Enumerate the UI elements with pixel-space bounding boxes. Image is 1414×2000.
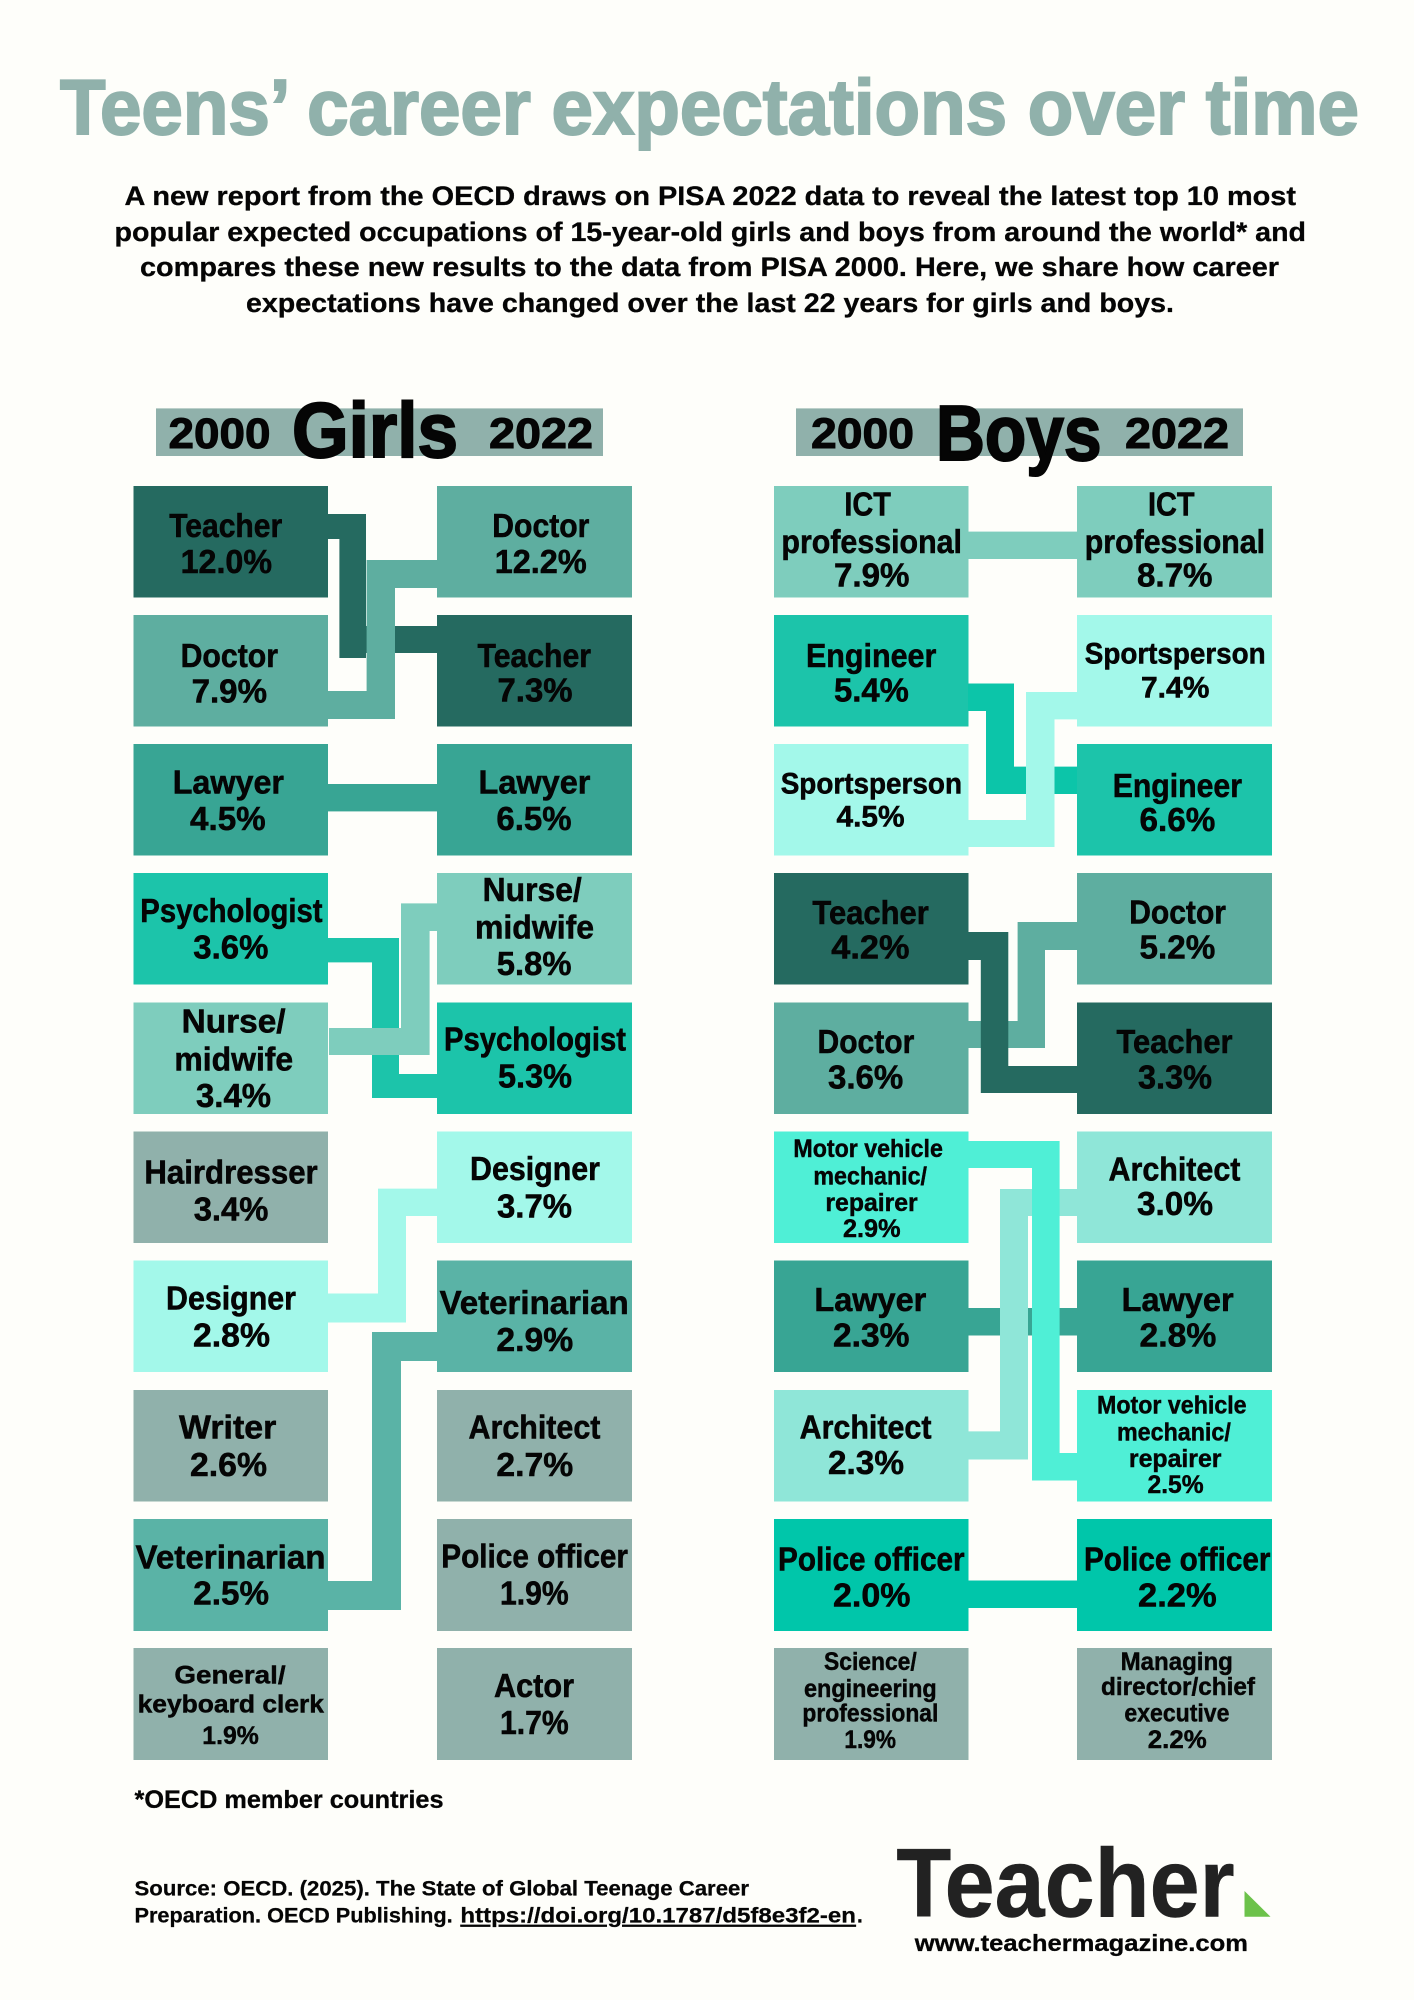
box: teacher 2000 [134, 486, 328, 598]
box: actor 2022: Actor [494, 1667, 574, 1704]
box: sportsperson 2022 [1077, 615, 1272, 726]
box: psychologist 2022: Psychologist [444, 1021, 626, 1058]
box: doctor 2022: Doctor [1129, 893, 1226, 930]
source text block: Preparation. OECD Publishing. [134, 1905, 453, 1928]
box: psychologist 2000 [134, 873, 328, 984]
box: architect 2000: 2.3% [828, 1444, 904, 1481]
box: ict professional 2022: ICT [1148, 486, 1195, 522]
box: lawyer 2000: Lawyer [173, 764, 284, 800]
box: nurse 2022: midwife [475, 908, 594, 945]
box: nurse 2000: Nurse/ [182, 1003, 286, 1040]
box: designer 2000: 2.8% [193, 1317, 270, 1354]
box: police officer 2022: Police officer [441, 1538, 628, 1575]
box: police officer 2000: Police officer [778, 1541, 965, 1578]
box: hairdresser 2000 [134, 1132, 328, 1243]
heading: boys 2000 / 2022: 2022 [1125, 410, 1229, 458]
source text block: . [857, 1905, 863, 1928]
connector: teacher [968, 932, 1077, 1093]
connector: designer [328, 1189, 437, 1322]
box: engineer 2022: 6.6% [1140, 801, 1215, 838]
box: motor vehicle mechanic 2022: Motor vehicle [1097, 1392, 1247, 1420]
box: police officer 2022: Police officer [1084, 1541, 1271, 1578]
box: designer 2022: 3.7% [497, 1188, 572, 1225]
connector: engineer [968, 684, 1077, 794]
box: actor 2022 [437, 1648, 632, 1760]
connector: psychologist [328, 938, 437, 1098]
box: doctor 2000: 3.6% [828, 1058, 903, 1095]
box: nurse 2000: midwife [174, 1040, 293, 1078]
box: science professional 2000: 1.9% [844, 1726, 896, 1754]
box: motor vehicle mechanic 2000: 2.9% [843, 1215, 900, 1243]
connector: motor vehicle mechanic [968, 1141, 1077, 1480]
box: general clerk 2000: 1.9% [202, 1722, 259, 1750]
source text block: https://doi.org/10.1787/d5f8e3f2-en [460, 1905, 856, 1928]
box: nurse 2000: 3.4% [196, 1077, 271, 1114]
box: teacher 2022: 3.3% [1138, 1058, 1212, 1095]
box: ict professional 2000 [774, 486, 968, 598]
box: doctor 2000: Doctor [818, 1023, 914, 1060]
box: engineer 2022: Engineer [1113, 767, 1242, 804]
box: police officer 2022: 1.9% [500, 1575, 569, 1612]
intro text block [114, 181, 1306, 318]
box: doctor 2000 [774, 1002, 968, 1114]
box: psychologist 2022: 5.3% [498, 1058, 572, 1094]
box: lawyer 2022 [437, 744, 632, 856]
box: lawyer 2022: 2.8% [1140, 1317, 1216, 1354]
box: architect 2022: Architect [468, 1408, 600, 1446]
box: veterinarian 2022: 2.9% [496, 1321, 573, 1358]
footnote: *OECD member countries [134, 1786, 444, 1814]
box: psychologist 2000: Psychologist [140, 892, 322, 929]
box: architect 2022 [1077, 1132, 1272, 1243]
box: police officer 2022 [1077, 1519, 1272, 1631]
box: motor vehicle mechanic 2022: mechanic/ [1117, 1418, 1231, 1446]
box: police officer 2000 [774, 1519, 968, 1631]
box: hairdresser 2000: 3.4% [194, 1191, 268, 1228]
heading: girls 2000 / 2022 [156, 386, 603, 474]
box: engineer 2000 [774, 615, 968, 726]
panel: boys [774, 389, 1272, 1760]
connector: doctor [968, 922, 1077, 1048]
connector: lawyer [328, 784, 437, 811]
box: ict professional 2000: 7.9% [834, 556, 910, 593]
box: doctor 2022 [1077, 873, 1272, 984]
box: veterinarian 2000 [134, 1519, 328, 1631]
box: nurse 2022: 5.8% [497, 945, 572, 982]
box: lawyer 2022: Lawyer [1122, 1281, 1234, 1318]
box: veterinarian 2000: Veterinarian [136, 1538, 326, 1576]
intro text block: A new report from the OECD draws on PISA 2022 data to reveal the latest top 10 most [124, 181, 1296, 211]
box: motor vehicle mechanic 2000: repairer [825, 1189, 918, 1217]
box: police officer 2022: 2.2% [1138, 1576, 1217, 1613]
box: doctor 2000 [134, 615, 328, 726]
logo: Teacher magazine: Teacher [896, 1829, 1235, 1938]
box: motor vehicle mechanic 2000: mechanic/ [813, 1162, 927, 1190]
box: architect 2022: Architect [1108, 1150, 1240, 1188]
box: lawyer 2022: 6.5% [496, 800, 572, 837]
box: engineer 2000: Engineer [806, 637, 936, 674]
heading: girls 2000 / 2022: 2022 [489, 410, 593, 458]
box: actor 2022: 1.7% [500, 1704, 569, 1741]
box: architect 2000: Architect [800, 1408, 932, 1446]
box: motor vehicle mechanic 2022: repairer [1129, 1445, 1222, 1473]
box: doctor 2022: Doctor [492, 507, 590, 544]
box: lawyer 2000 [774, 1260, 968, 1372]
connector: lawyer [968, 1308, 1077, 1336]
box: ict professional 2000: ICT [844, 486, 891, 522]
box: ict professional 2000: professional [781, 523, 962, 560]
box: teacher 2000 [774, 873, 968, 984]
box: motor vehicle mechanic 2022 [1077, 1390, 1272, 1502]
box: veterinarian 2022 [437, 1260, 632, 1372]
panel: girls [134, 386, 632, 1760]
box: nurse 2022: Nurse/ [483, 871, 582, 908]
box: hairdresser 2000: Hairdresser [144, 1154, 318, 1191]
connector: sportsperson [968, 692, 1077, 847]
connector: doctor [328, 560, 437, 719]
box: sportsperson 2000 [774, 744, 968, 856]
box: designer 2022: Designer [470, 1150, 600, 1187]
box: engineer 2022 [1077, 744, 1272, 856]
box: writer 2000 [134, 1390, 328, 1502]
box: designer 2000: Designer [166, 1280, 296, 1316]
box: sportsperson 2000: Sportsperson [781, 768, 962, 800]
box: nurse 2000 [134, 1002, 328, 1114]
box: sportsperson 2022: 7.4% [1141, 672, 1209, 705]
box: motor vehicle mechanic 2000 [774, 1132, 968, 1243]
box: teacher 2022 [437, 615, 632, 726]
title: Teens’ career expectations over time [60, 63, 1359, 151]
connector: nurse [329, 903, 437, 1055]
box: architect 2000 [774, 1390, 968, 1502]
box: motor vehicle mechanic 2000: Motor vehicle [793, 1135, 943, 1163]
box: doctor 2022: 5.2% [1140, 929, 1215, 966]
box: managing director 2022 [1077, 1648, 1272, 1760]
box: teacher 2000: Teacher [169, 507, 282, 544]
logo: Teacher magazine: www.teachermagazine.com [914, 1930, 1248, 1956]
source text block: Source: OECD. (2025). The State of Global Teenage Career [134, 1878, 749, 1901]
heading: boys 2000 / 2022: Boys [936, 389, 1102, 477]
box: ict professional 2022: professional [1085, 523, 1265, 560]
box: lawyer 2000: Lawyer [814, 1281, 926, 1318]
box: writer 2000: 2.6% [190, 1446, 267, 1483]
box: architect 2022 [437, 1390, 632, 1502]
box: lawyer 2022 [1077, 1260, 1272, 1372]
box: doctor 2022 [437, 486, 632, 598]
connector: architect [968, 1189, 1077, 1460]
box: ict professional 2022: 8.7% [1137, 556, 1212, 593]
box: motor vehicle mechanic 2022: 2.5% [1148, 1471, 1204, 1499]
box: architect 2022: 2.7% [496, 1446, 573, 1483]
connector: ict professional [968, 532, 1077, 559]
box: doctor 2000: 7.9% [192, 672, 267, 709]
box: general clerk 2000: General/ [174, 1662, 286, 1690]
box: teacher 2022: Teacher [478, 637, 591, 674]
box: teacher 2000: Teacher [812, 894, 929, 931]
box: general clerk 2000 [134, 1648, 328, 1760]
box: designer 2000 [134, 1260, 328, 1372]
intro text block: expectations have changed over the last 22 years for girls and boys. [246, 288, 1174, 318]
box: managing director 2022: executive [1124, 1700, 1229, 1728]
box: sportsperson 2022: Sportsperson [1085, 638, 1266, 671]
heading: boys 2000 / 2022: 2000 [811, 410, 914, 458]
box: ict professional 2022 [1077, 486, 1272, 598]
connector: veterinarian [328, 1332, 437, 1610]
box: police officer 2000: 2.0% [833, 1576, 910, 1613]
heading: girls 2000 / 2022: 2000 [168, 410, 270, 458]
box: lawyer 2000: 2.3% [833, 1317, 910, 1354]
box: veterinarian 2022: Veterinarian [440, 1284, 629, 1321]
box: veterinarian 2000: 2.5% [193, 1575, 269, 1612]
box: general clerk 2000: keyboard clerk [138, 1691, 324, 1719]
box: science professional 2000: professional [802, 1700, 938, 1728]
box: teacher 2000: 12.0% [181, 543, 272, 580]
box: teacher 2022: Teacher [1116, 1023, 1233, 1060]
box: nurse 2022 [437, 871, 632, 984]
box: teacher 2000: 4.2% [831, 929, 910, 966]
box: science professional 2000 [774, 1648, 968, 1760]
box: sportsperson 2000: 4.5% [836, 800, 905, 834]
box: engineer 2000: 5.4% [834, 672, 909, 708]
box: architect 2022: 3.0% [1137, 1185, 1213, 1222]
box: police officer 2022 [437, 1519, 632, 1631]
box: writer 2000: Writer [179, 1408, 276, 1446]
box: psychologist 2000: 3.6% [193, 929, 268, 966]
box: science professional 2000: engineering [804, 1675, 937, 1703]
box: lawyer 2022: Lawyer [478, 764, 591, 800]
intro text block: popular expected occupations of 15-year-old girls and boys from around the world* and [114, 217, 1306, 247]
box: teacher 2022 [1077, 1002, 1272, 1114]
heading: girls 2000 / 2022: Girls [292, 386, 458, 474]
intro text block: compares these new results to the data from PISA 2000. Here, we share how career [140, 252, 1280, 282]
box: lawyer 2000: 4.5% [190, 800, 266, 837]
source text block [134, 1878, 863, 1928]
box: doctor 2000: Doctor [181, 637, 278, 674]
box: managing director 2022: 2.2% [1148, 1726, 1207, 1754]
box: designer 2022 [437, 1132, 632, 1243]
box: lawyer 2000 [134, 744, 328, 856]
box: doctor 2022: 12.2% [495, 543, 587, 580]
box: managing director 2022: Managing [1121, 1648, 1233, 1676]
connector: police officer [968, 1580, 1077, 1608]
box: psychologist 2022 [437, 1002, 632, 1114]
box: managing director 2022: director/chief [1101, 1673, 1256, 1701]
heading: boys 2000 / 2022 [796, 389, 1243, 477]
box: teacher 2022: 7.3% [498, 672, 572, 708]
box: science professional 2000: Science/ [824, 1648, 917, 1676]
connector: teacher [328, 514, 437, 658]
